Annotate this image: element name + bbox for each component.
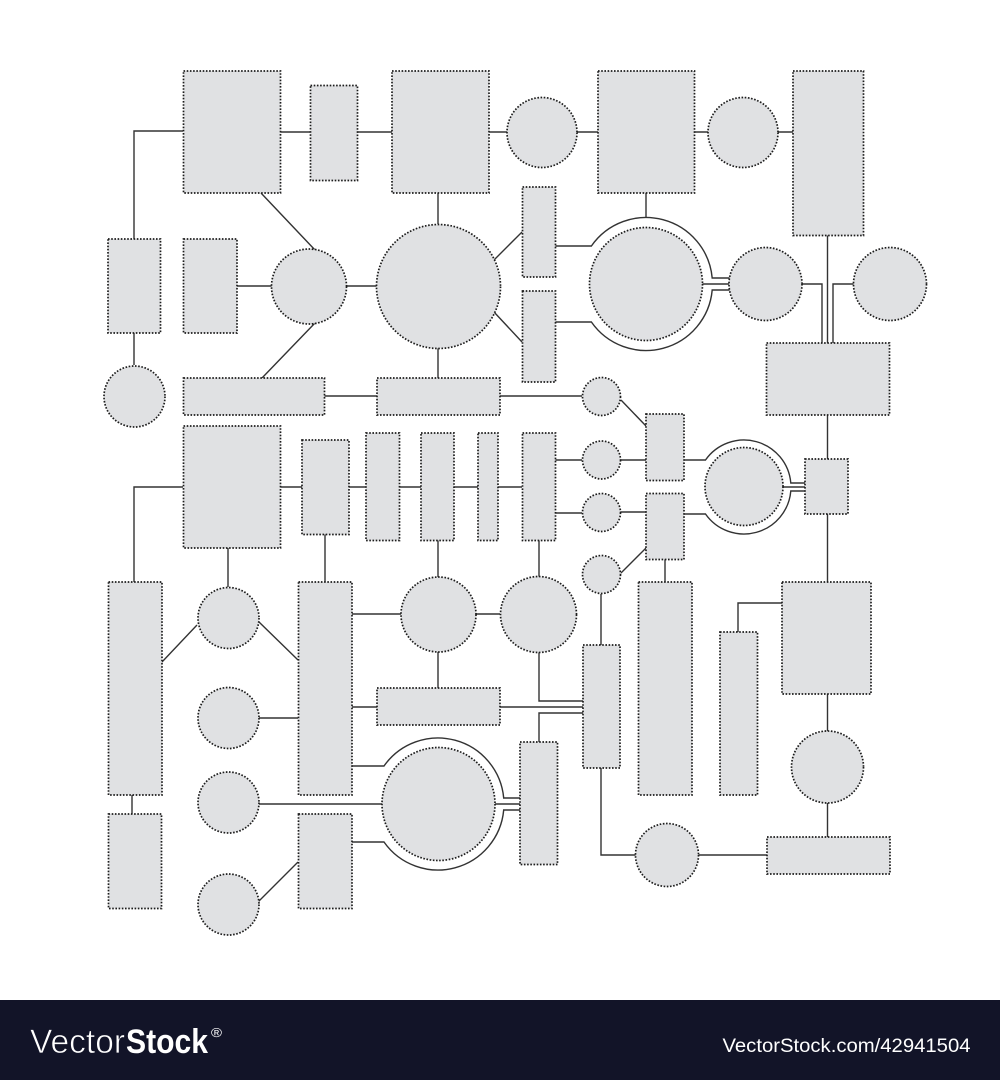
- footer logo: Stock: [126, 1023, 209, 1061]
- ring outline: upper large circle: [555, 218, 730, 350]
- shapes: fifth row: [108, 576, 871, 795]
- shapes: third row: [104, 366, 848, 526]
- connectors: upper section: [134, 131, 854, 582]
- footer logo: Vector: [30, 1023, 125, 1061]
- footer image id: VectorStock.com/42941504: [722, 1036, 971, 1057]
- footer bar: [0, 1000, 1000, 1080]
- shapes: second row: [108, 187, 926, 415]
- shapes: fourth row: [184, 426, 684, 594]
- connectors: lower section: [132, 594, 828, 910]
- shapes: bottom row: [108, 688, 890, 935]
- ring outline: middle circle: [684, 440, 805, 534]
- shapes: top row: [184, 71, 864, 236]
- footer logo: ®: [211, 1025, 222, 1040]
- footer logo: [30, 1023, 222, 1061]
- ring outline: lower large circle: [258, 738, 520, 870]
- connectors: middle section: [134, 400, 665, 587]
